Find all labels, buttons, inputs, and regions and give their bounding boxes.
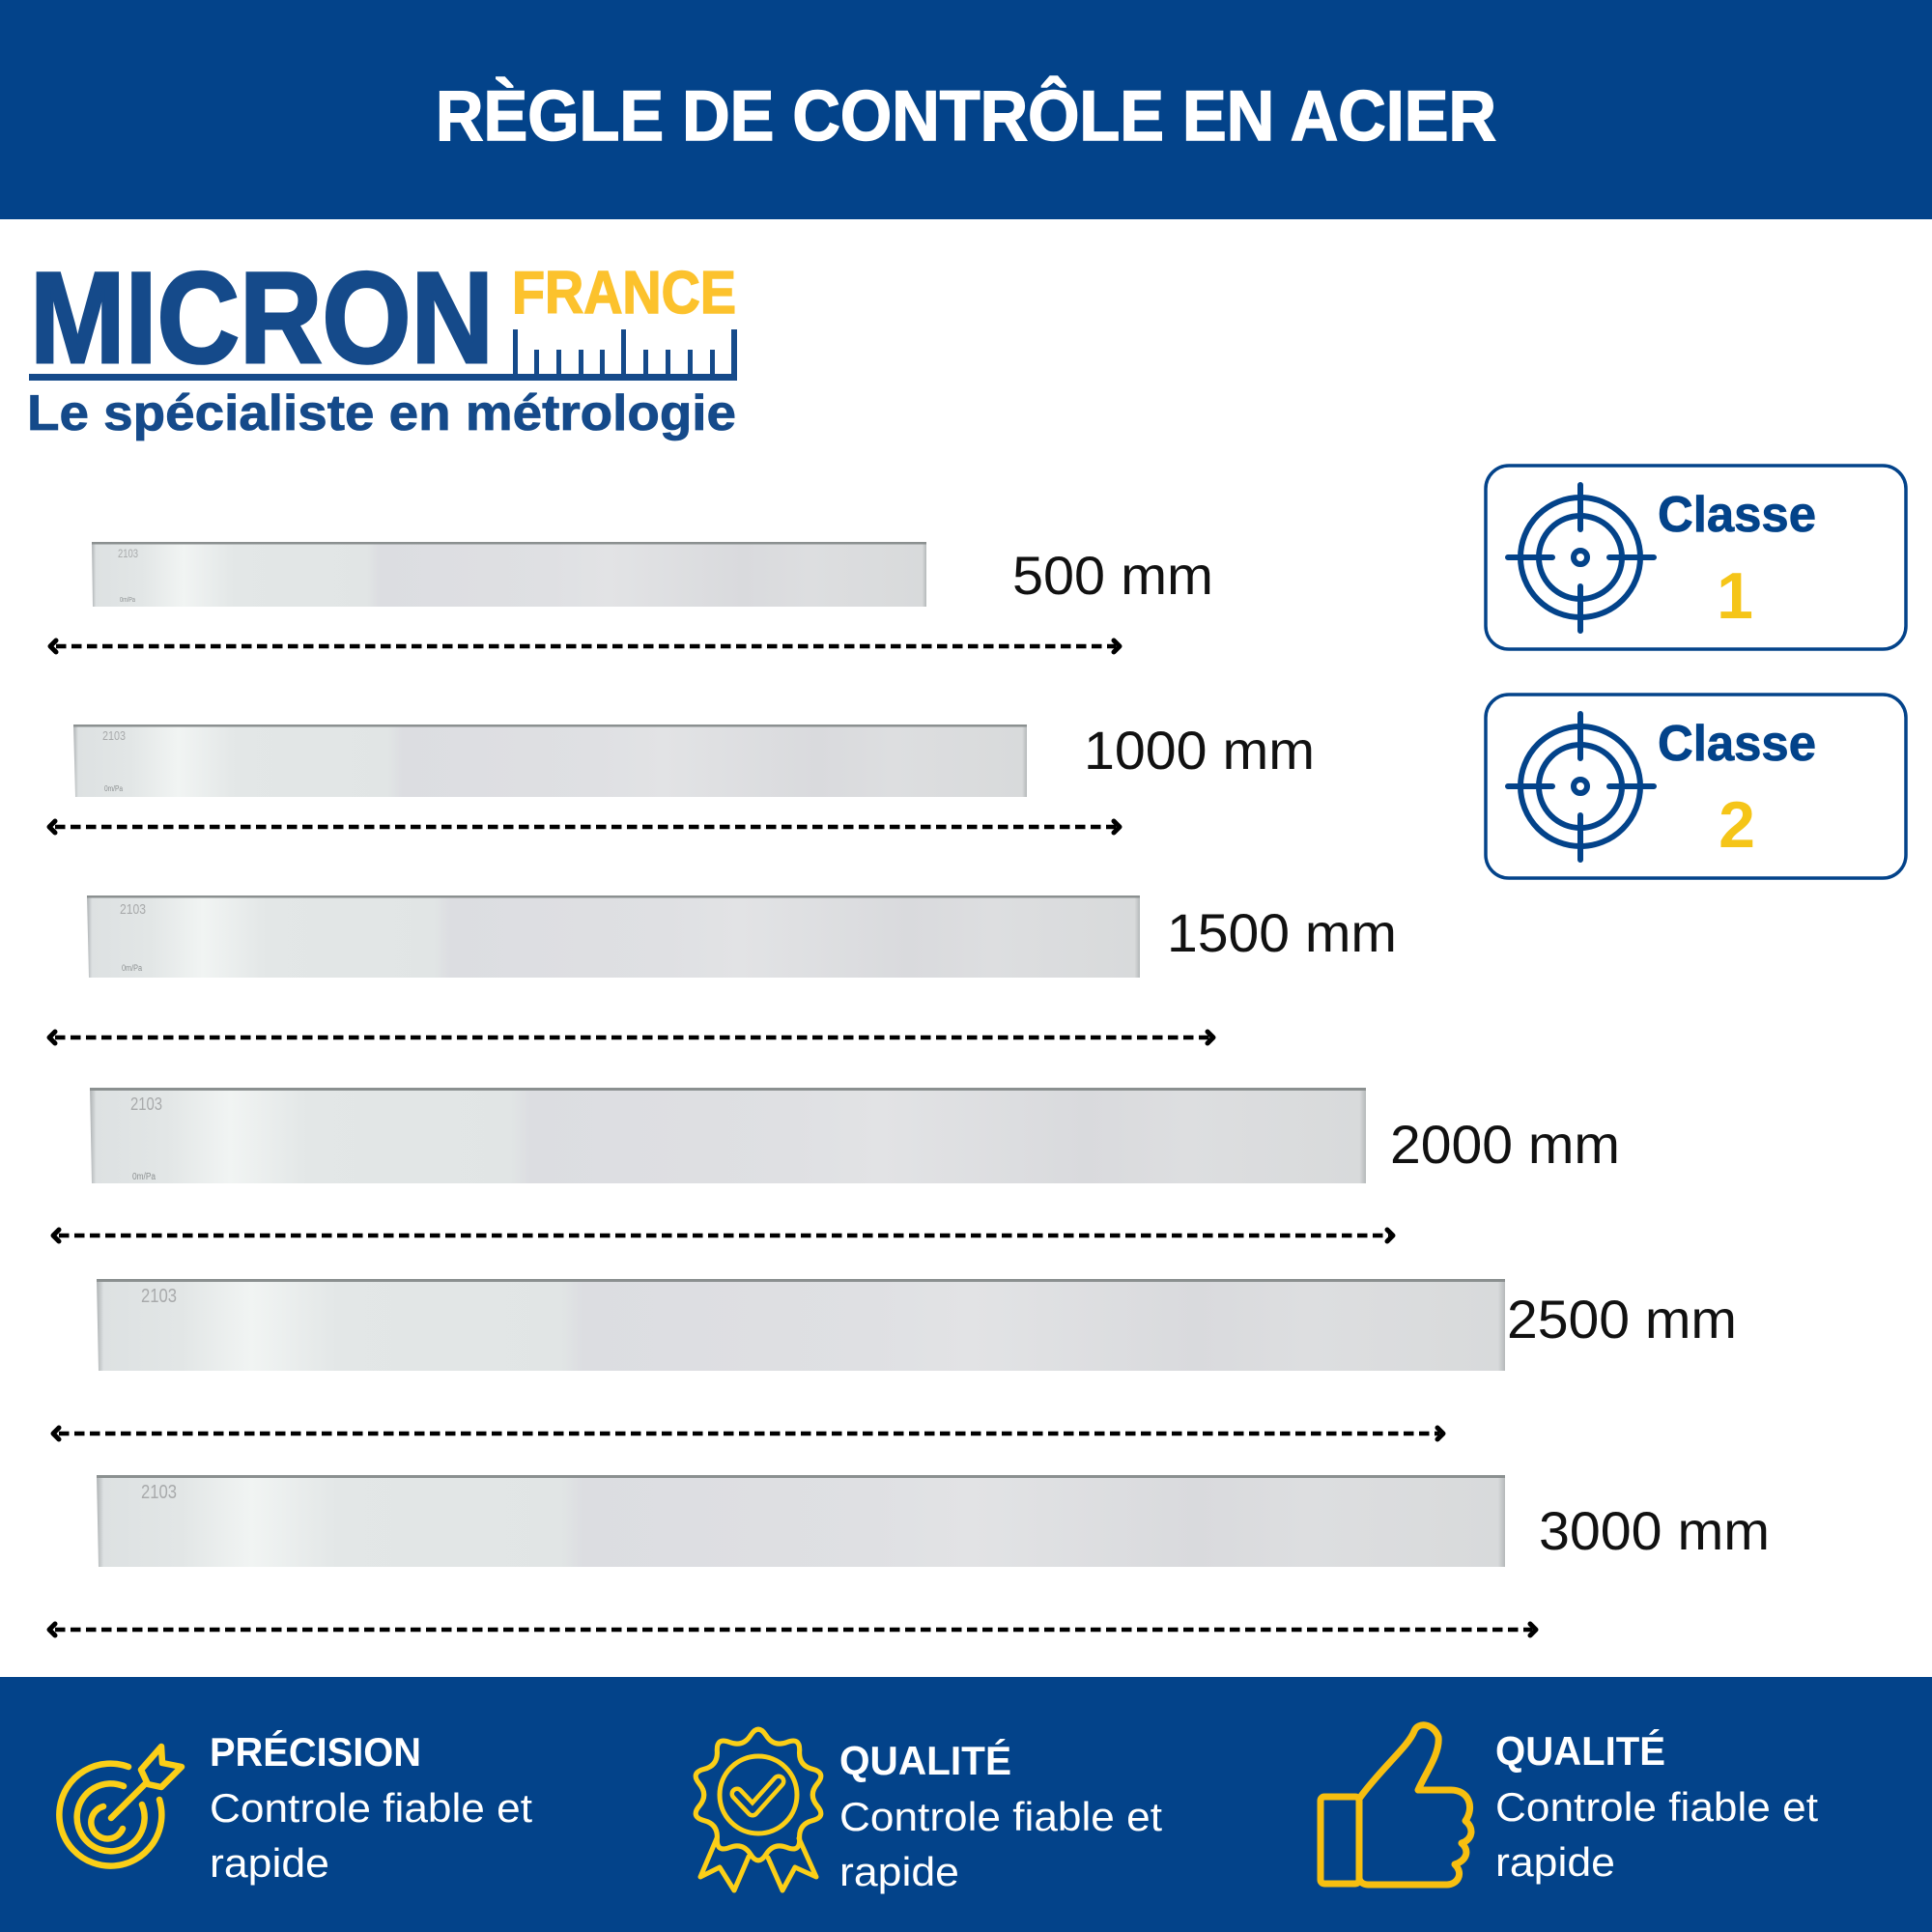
arrow 1000 mm xyxy=(49,821,1120,833)
ruler 1500 mm xyxy=(87,895,1140,978)
number 1: 1 xyxy=(1717,559,1753,633)
ruler 2000 mm: 0m/Pa xyxy=(132,1172,156,1182)
label 500 mm: 500 mm xyxy=(1012,545,1213,606)
arrow 500 mm xyxy=(50,640,1120,652)
ruler 1500 mm: 0m/Pa xyxy=(122,963,142,973)
ruler 3000 mm xyxy=(97,1475,1505,1567)
label 1000 mm: 1000 mm xyxy=(1084,720,1315,781)
label 2000 mm: 2000 mm xyxy=(1390,1114,1620,1175)
heading précision: PRÉCISION xyxy=(210,1729,421,1775)
label 1500 mm: 1500 mm xyxy=(1167,902,1397,963)
label 3000 mm: 3000 mm xyxy=(1539,1500,1770,1561)
text précision: rapide xyxy=(210,1840,329,1886)
ruler 2500 mm xyxy=(97,1279,1505,1371)
logo word France: FRANCE xyxy=(512,260,736,327)
label classe 1: Classe xyxy=(1658,487,1816,543)
text qualité xyxy=(839,1794,1162,1894)
ruler 1000 mm: 0m/Pa xyxy=(104,784,123,793)
icon: rosette with check xyxy=(696,1729,821,1890)
ruler 1500 mm: 2103 xyxy=(120,901,146,918)
text précision xyxy=(210,1785,532,1886)
footer item: qualité badge xyxy=(696,1729,1162,1894)
ruler 1000 mm: 2103 xyxy=(102,728,126,743)
ruler 2000 mm xyxy=(90,1088,1366,1183)
icon: target with arrow xyxy=(59,1747,182,1866)
panel: classe 2 xyxy=(1486,695,1906,878)
arrow 2500 mm xyxy=(53,1428,1443,1439)
ruler 1000 mm xyxy=(73,724,1027,797)
ruler 500 mm: 0m/Pa xyxy=(120,597,135,604)
icon: thumbs up xyxy=(1321,1725,1471,1885)
ruler 500 mm xyxy=(92,542,926,607)
text qualité: Controle fiable et xyxy=(1495,1784,1818,1830)
arrow 3000 mm xyxy=(49,1624,1536,1635)
text qualité xyxy=(1495,1784,1818,1885)
heading qualité: QUALITÉ xyxy=(1495,1728,1665,1774)
logo ruler scale xyxy=(29,329,737,381)
icon: crosshair target 1 xyxy=(1508,485,1654,631)
text qualité: rapide xyxy=(1495,1839,1615,1885)
number 2: 2 xyxy=(1719,788,1755,862)
ruler 2000 mm: 2103 xyxy=(130,1094,162,1114)
ruler 3000 mm: 2103 xyxy=(141,1482,177,1503)
icon: crosshair target 2 xyxy=(1508,714,1654,860)
text qualité: rapide xyxy=(839,1849,959,1894)
footer item: qualité thumb xyxy=(1321,1725,1818,1885)
title: RÈGLE DE CONTRÔLE EN ACIER xyxy=(436,77,1496,156)
logo: Micron France xyxy=(27,246,737,441)
label 2500 mm: 2500 mm xyxy=(1507,1289,1737,1350)
text qualité: Controle fiable et xyxy=(839,1794,1162,1839)
logo wordmark: MICRON xyxy=(30,246,494,390)
header band xyxy=(0,0,1932,219)
panel: classe 1 xyxy=(1486,466,1906,649)
text précision: Controle fiable et xyxy=(210,1785,532,1831)
arrow 1500 mm xyxy=(49,1032,1213,1043)
ruler 2500 mm: 2103 xyxy=(141,1286,177,1307)
footer item: précision xyxy=(59,1729,532,1886)
arrow 2000 mm xyxy=(53,1230,1393,1241)
ruler 500 mm: 2103 xyxy=(118,547,138,560)
footer band xyxy=(0,1677,1932,1932)
logo tagline: Le spécialiste en métrologie xyxy=(27,385,736,441)
label classe 2: Classe xyxy=(1658,716,1816,772)
heading qualité: QUALITÉ xyxy=(839,1738,1011,1783)
